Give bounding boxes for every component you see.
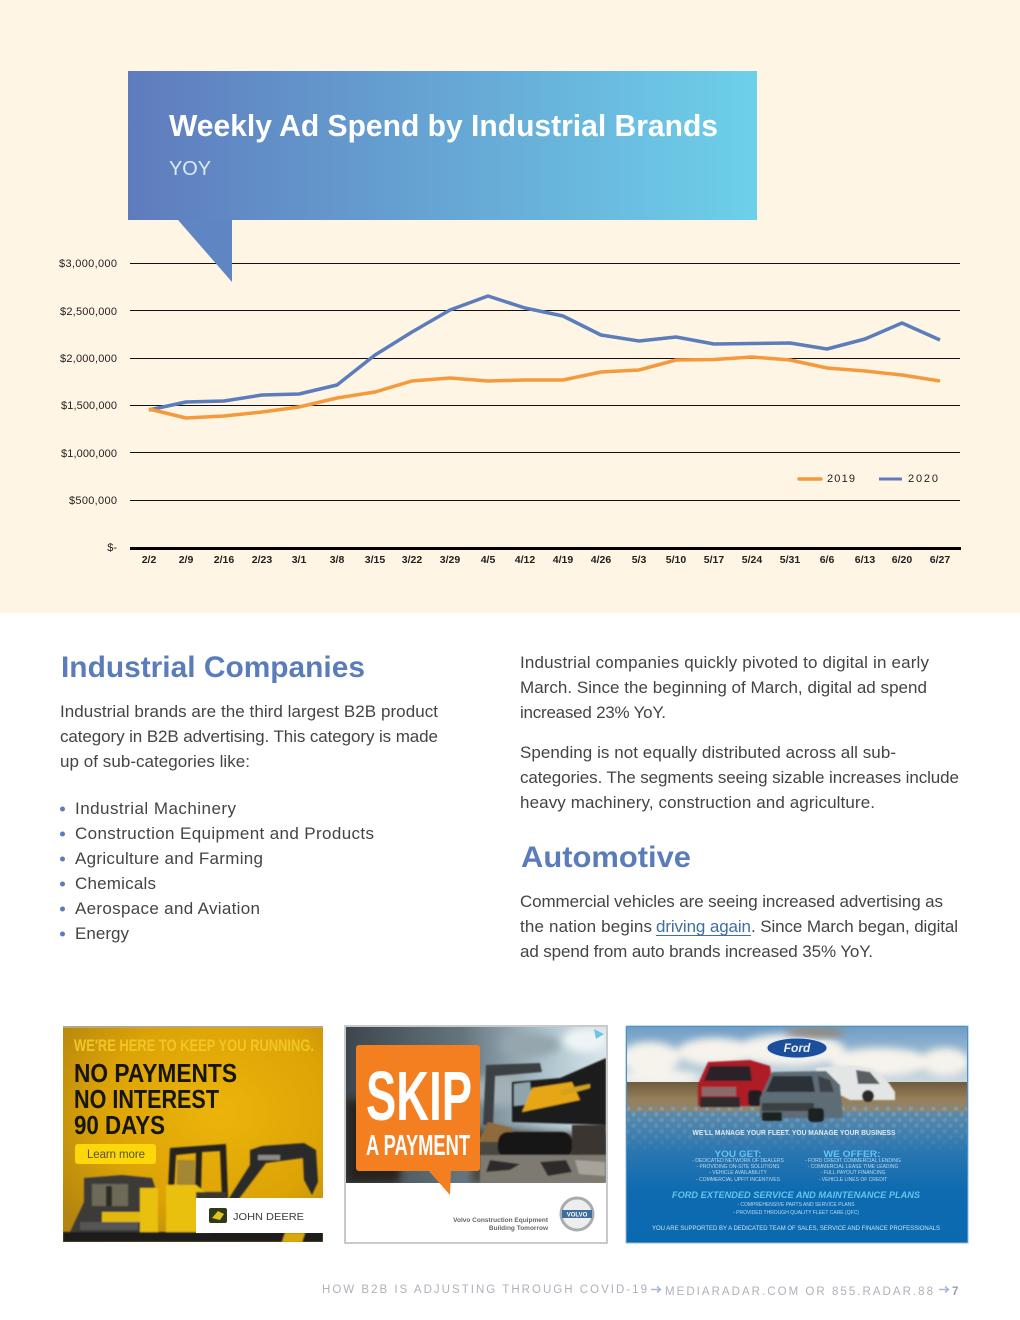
ad headline: NO PAYMENTS [74, 1058, 237, 1088]
footer: HOW B2B IS ADJUSTING THROUGH COVID-19 [322, 1284, 647, 1296]
bulleted list: sub-categories [60, 799, 374, 943]
y axis labels: $- [107, 542, 117, 554]
bulleted list: sub-categories: Construction Equipment and Products [75, 824, 374, 843]
y axis labels: $3,000,000 [59, 258, 117, 270]
text block: pivot to digital: March. Since the beginning of March, digital ad spend [520, 678, 927, 697]
Ford ad copy: YOU GET: [714, 1149, 762, 1159]
excavator illustration [63, 1143, 323, 1242]
ad: Volvo skip a payment [345, 1026, 607, 1243]
John Deere logo box: JOHN DEERE [233, 1212, 304, 1223]
text block: spending distribution: heavy machinery, construction and agriculture. [520, 793, 875, 812]
x axis labels: 5/17 [704, 554, 724, 566]
title: Weekly Ad Spend by Industrial Brands [169, 108, 718, 143]
heading: Industrial Companies: Industrial Companies [61, 651, 365, 684]
ad: John Deere [63, 1026, 323, 1242]
text block: automotive [520, 892, 958, 961]
text block: automotive: driving again [656, 917, 751, 936]
x axis labels: 5/10 [666, 554, 686, 566]
x axis labels: 5/3 [632, 554, 646, 566]
text block: industrial intro: up of sub-categories like: [60, 752, 250, 771]
page number: 7 [952, 1286, 958, 1298]
text block: pivot to digital [520, 653, 930, 722]
blue fade [627, 1112, 967, 1184]
sky [627, 1027, 967, 1082]
arrow [651, 1286, 660, 1292]
x axis labels: 2/16 [214, 554, 234, 566]
vans [698, 1060, 895, 1122]
ad headline: NO INTEREST [74, 1084, 219, 1114]
x axis labels [142, 554, 950, 566]
x axis labels: 6/6 [820, 554, 834, 566]
x axis labels: 3/15 [365, 554, 385, 566]
grey van [760, 1071, 843, 1118]
photo area [627, 1027, 967, 1184]
y axis labels: $1,000,000 [61, 448, 117, 460]
Volvo sign-off: Volvo Construction Equipment [453, 1217, 549, 1224]
horizontal grid [130, 264, 960, 500]
Ford ad copy: - FULL PAYOUT FINANCING [820, 1170, 886, 1176]
series 2020 [149, 296, 940, 410]
Ford ad copy: - VEHICLE AVAILABILITY [709, 1170, 767, 1176]
bulleted list: sub-categories: Energy [75, 924, 130, 943]
footer [322, 1284, 958, 1298]
John Deere logo box [196, 1198, 323, 1233]
text block: pivot to digital: Industrial companies quickly pivoted to digital in early [520, 653, 930, 672]
halftone [627, 1105, 967, 1144]
cab frame [168, 1144, 228, 1198]
bulleted list: sub-categories: Chemicals [75, 874, 156, 893]
x axis labels: 3/1 [292, 554, 306, 566]
orange speech bubble [356, 1045, 480, 1195]
bulleted list: sub-categories: Agriculture and Farming [75, 849, 263, 868]
play badge [594, 1029, 604, 1039]
Ford logo [767, 1038, 827, 1058]
y axis labels: $2,000,000 [60, 353, 117, 365]
Ford ad copy: - COMMERCIAL UPFIT INCENTIVES [696, 1177, 781, 1183]
red van [698, 1060, 773, 1106]
Ford ad copy: WE OFFER: [824, 1149, 880, 1159]
text block: spending distribution [520, 743, 959, 812]
y axis labels [59, 258, 117, 554]
Ford logo: Ford [784, 1041, 811, 1055]
x axis labels: 2/9 [179, 554, 193, 566]
Volvo sign-off: VOLVO [567, 1212, 588, 1218]
legend: 2020 [908, 473, 938, 485]
button: learn more [75, 1144, 156, 1164]
text block: pivot to digital: increased 23% YoY. [520, 703, 666, 722]
footer: MEDIARADAR.COM OR 855.RADAR.88 [665, 1286, 933, 1298]
y axis labels: $1,500,000 [61, 400, 117, 412]
x axis labels: 4/26 [591, 554, 611, 566]
orange speech bubble: A PAYMENT [366, 1130, 470, 1162]
y axis labels: $2,500,000 [60, 306, 117, 318]
body [166, 1185, 210, 1240]
text block: industrial intro: Industrial brands are the third largest B2B product [60, 702, 438, 721]
x axis [130, 547, 961, 550]
bulleted list: sub-categories: Industrial Machinery [75, 799, 236, 818]
x axis labels: 5/31 [780, 554, 800, 566]
Ford ad copy: - VEHICLE LINES OF CREDIT [819, 1177, 887, 1183]
legend: 2019 [827, 473, 855, 485]
text block: automotive: . Since March began, digital [751, 917, 958, 936]
Volvo sign-off: Building Tomorrow [489, 1225, 549, 1232]
arm [226, 1143, 318, 1203]
text block: industrial intro: category in B2B advertising. This category is made [60, 727, 438, 746]
x axis labels: 4/5 [481, 554, 495, 566]
Ford ad copy: - DEDICATED NETWORK OF DEALERS [692, 1158, 784, 1164]
x axis labels: 3/8 [330, 554, 344, 566]
x axis labels: 6/13 [855, 554, 875, 566]
series 2019 [149, 357, 940, 418]
Ford ad copy: - FORD CREDIT COMMERCIAL LENDING [805, 1158, 901, 1164]
x axis labels: 4/19 [553, 554, 573, 566]
text block: automotive: the nation begins [520, 917, 652, 936]
white van [815, 1065, 895, 1100]
skid steer [70, 1175, 156, 1232]
ad: Ford fleet [620, 1026, 969, 1243]
ad headline [74, 1036, 314, 1140]
x axis labels: 2/2 [142, 554, 156, 566]
chart panel background [0, 0, 1020, 613]
bulleted list: sub-categories: Aerospace and Aviation [75, 899, 260, 918]
Ford ad copy: - PROVIDING ON-SITE SOLUTIONS [696, 1164, 780, 1170]
ground [627, 1082, 967, 1112]
x axis labels: 6/20 [892, 554, 912, 566]
callout tail [178, 220, 232, 282]
x axis labels: 6/27 [930, 554, 950, 566]
excavator [478, 1058, 606, 1183]
x axis labels: 5/24 [742, 554, 762, 566]
text block: automotive: ad spend from auto brands increased 35% YoY. [520, 942, 873, 961]
ad headline: WE'RE HERE TO KEEP YOU RUNNING. [74, 1036, 314, 1055]
text block: automotive: Commercial vehicles are seeing increased advertising as [520, 892, 943, 911]
ad headline: 90 DAYS [74, 1110, 165, 1140]
line chart: weekly ad spend [59, 258, 961, 566]
Ford ad copy: YOU ARE SUPPORTED BY A DEDICATED TEAM OF SALES, SERVICE AND FINANCE PROFESSIONALS [652, 1226, 940, 1232]
x axis labels: 3/22 [402, 554, 422, 566]
Ford ad copy: - COMMERCIAL LEASE TIME LEADING [808, 1164, 899, 1170]
subtitle: YOY [169, 158, 211, 180]
text block: industrial intro [60, 702, 438, 771]
button: learn more: Learn more [87, 1149, 145, 1161]
bubble copy: SKIP [366, 1057, 472, 1135]
Ford ad copy: WE'LL MANAGE YOUR FLEET. YOU MANAGE YOUR BUSINESS [692, 1128, 896, 1137]
x axis labels: 4/12 [515, 554, 535, 566]
legend [799, 473, 938, 485]
Ford ad copy [652, 1128, 940, 1232]
Ford ad copy: - COMPREHENSIVE PARTS AND SERVICE PLANS [737, 1202, 855, 1208]
arrow [939, 1286, 948, 1292]
text block: spending distribution: Spending is not equally distributed across all sub- [520, 743, 896, 762]
x axis labels: 2/23 [252, 554, 272, 566]
x axis labels: 3/29 [440, 554, 460, 566]
y axis labels: $500,000 [69, 495, 117, 507]
title callout [128, 71, 757, 282]
Volvo sign-off [453, 1198, 593, 1232]
Ford ad copy: - PROVIDED THROUGH QUALITY FLEET CARE (QFC) [733, 1210, 859, 1216]
heading: Automotive: Automotive [521, 841, 691, 874]
Ford ad copy: FORD EXTENDED SERVICE AND MAINTENANCE PLANS [672, 1190, 920, 1200]
photo [346, 1027, 607, 1183]
text block: spending distribution: categories. The segments seeing sizable increases include [520, 768, 959, 787]
